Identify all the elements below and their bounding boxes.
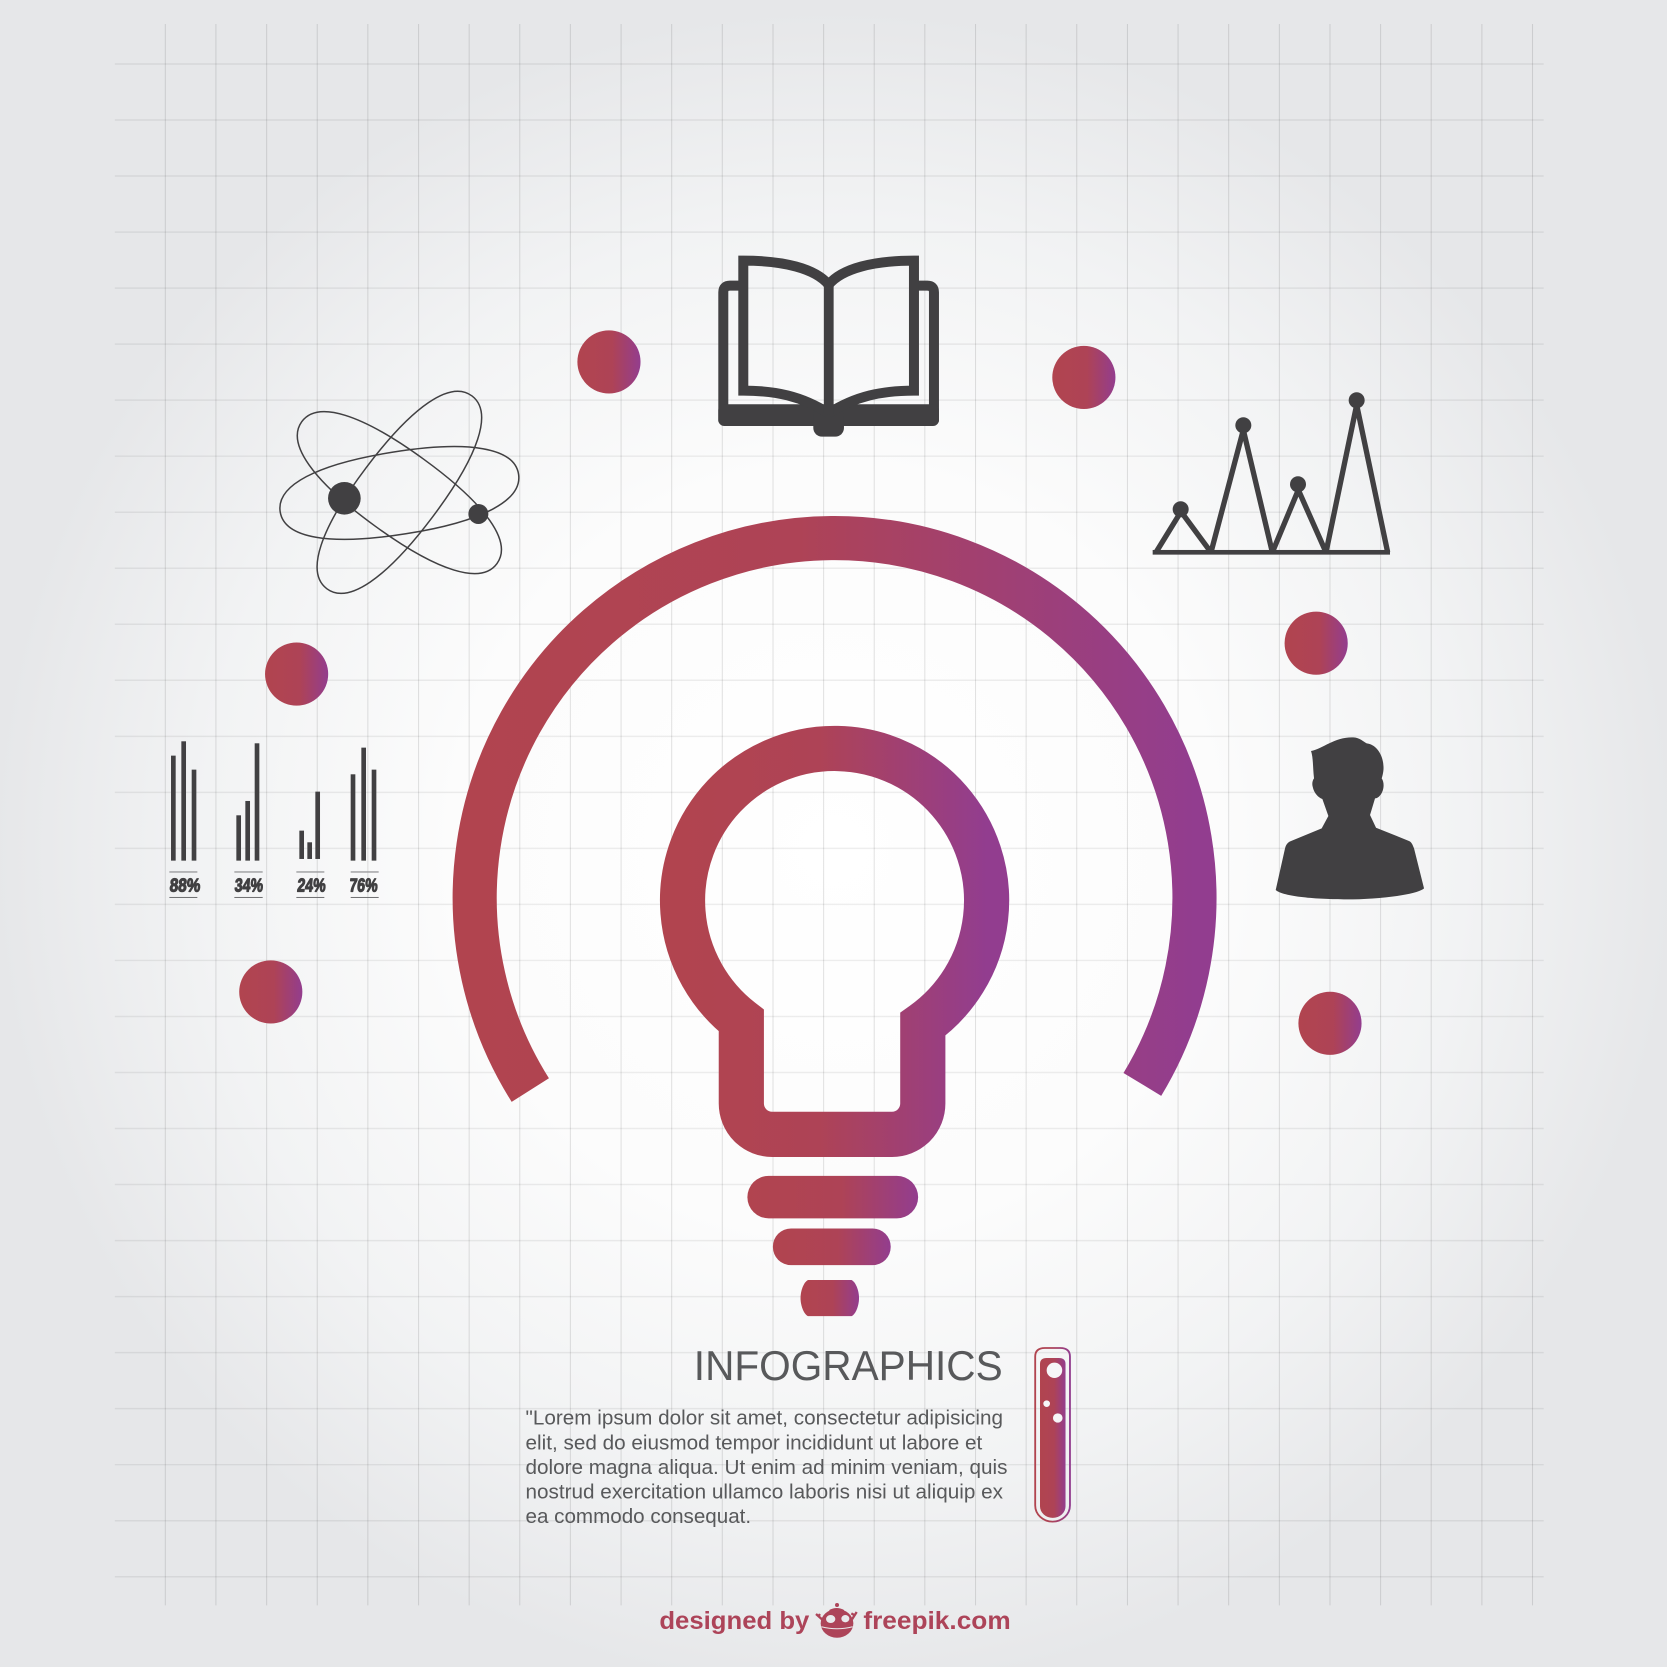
- dot right lower: [1298, 992, 1362, 1055]
- paragraph: nostrud exercitation ullamco laboris nisi ut aliquip ex: [526, 1481, 1003, 1503]
- bulb base tip: [801, 1280, 859, 1316]
- dot left lower: [239, 960, 302, 1023]
- bar group 88%: 88%: [169, 875, 202, 896]
- paragraph: "Lorem ipsum dolor sit amet, consectetur adipisicing: [526, 1408, 1003, 1429]
- large arc around bulb: [475, 538, 1194, 1090]
- heading: INFOGRAPHICS: [694, 1343, 1003, 1389]
- light bulb: [683, 748, 987, 1316]
- icon: atom: [274, 371, 525, 614]
- bar group 76%: [349, 748, 379, 898]
- footer credit: freepik.com: [863, 1607, 1011, 1635]
- footer credit: designed by: [659, 1607, 809, 1635]
- bulb outline: [683, 748, 987, 1134]
- bar group 34%: 34%: [234, 875, 264, 896]
- paragraph: ea commodo consequat.: [526, 1506, 751, 1528]
- icon: test tube: [1035, 1348, 1070, 1522]
- icon: open book: [718, 261, 939, 437]
- dot left upper: [265, 642, 328, 706]
- footer credit: [659, 1603, 1011, 1638]
- icon: person silhouette: [1276, 737, 1424, 899]
- paragraph: dolore magna aliqua. Ut enim ad minim veniam, quis: [526, 1457, 1007, 1479]
- paragraph: [526, 1408, 1007, 1528]
- bar charts with percentages: [169, 741, 379, 898]
- bar group 76%: 76%: [349, 875, 379, 896]
- bar group 88%: [169, 741, 202, 898]
- text block and test tube: [526, 1343, 1070, 1528]
- bar group 24%: 24%: [297, 875, 327, 896]
- dot top right: [1052, 346, 1115, 409]
- bulb base bar 2: [773, 1228, 891, 1265]
- paragraph: elit, sed do eiusmod tempor incididunt ut labore et: [526, 1432, 982, 1454]
- bulb base bar 1: [747, 1176, 918, 1218]
- dot top left: [577, 330, 641, 393]
- icon: line chart peaks: [1153, 392, 1390, 555]
- dot right upper: [1285, 612, 1348, 675]
- icon: freepik mascot: [816, 1603, 857, 1638]
- bar group 34%: [234, 743, 264, 898]
- bar group 24%: [296, 792, 327, 898]
